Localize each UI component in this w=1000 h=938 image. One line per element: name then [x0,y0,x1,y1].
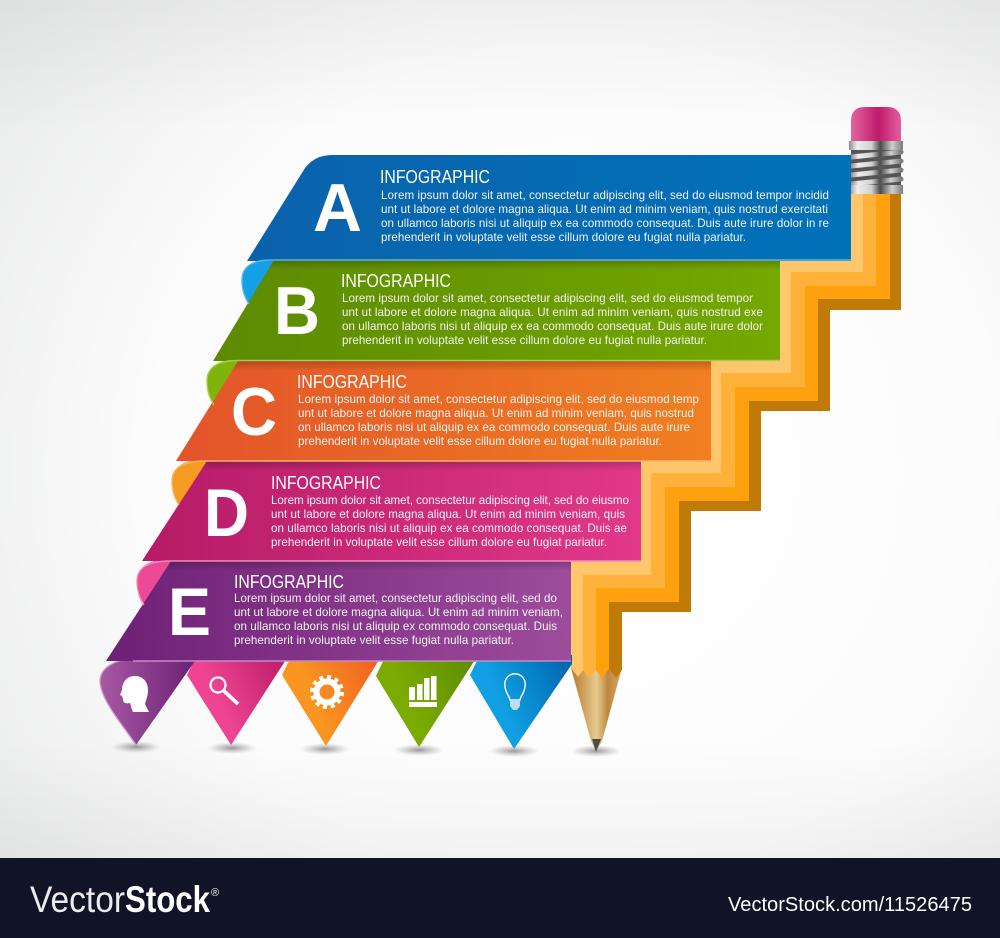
text block E: on ullamco laboris nisi ut aliquip ex commodo consequat. Duis [234,620,557,633]
pin: purple head [100,659,195,745]
pencil [571,107,903,752]
pins [100,655,572,749]
heading B: INFOGRAPHIC [341,270,451,291]
letter B: B [274,273,320,349]
text block E [234,592,563,647]
text block B [342,292,763,347]
heading C: INFOGRAPHIC [297,371,407,392]
ribbon A curl [242,258,285,304]
pencil wood tip [571,668,622,752]
text block E: unt ut labore et dolore magna aliqua. Ut enim ad minim veniam, [234,606,563,619]
letter C: C [231,374,277,450]
ribbon D band [142,461,641,561]
icon: head [120,676,149,712]
icon: magnifier [210,678,238,704]
footer logo: Vector [30,879,125,920]
ribbon D curl [137,559,180,605]
letter E: E [168,574,211,650]
icon: bar chart [409,676,437,707]
text block D [271,494,629,549]
heading E: INFOGRAPHIC [234,571,344,592]
text block B: Lorem ipsum dolor sit amet, consectetur adipiscing elit, sed do eiusmod tempor [342,292,753,305]
pencil lead [592,739,601,752]
pin: green chart [376,655,478,747]
text block E: prehenderit in voluptate velit esse fugiat nulla pariatur. [234,634,514,647]
text block C [298,393,699,448]
text block D: Lorem ipsum dolor sit amet, consectetur adipiscing elit, sed do eiusmo [271,494,629,507]
panel: ribbon D [137,461,711,605]
text block E: Lorem ipsum dolor sit amet, consectetur adipiscing elit, sed do [234,592,557,605]
text block A [381,189,829,244]
pin: pink magnifier [187,655,289,745]
letter D: D [204,475,249,551]
text block D: prehenderit in voluptate velit esse cillum dolore eu fugiat pariatur. [271,536,607,549]
panel: ribbon A [242,155,851,304]
footer logo [30,879,210,920]
pin shadows [111,741,621,757]
letter A: A [313,170,362,246]
text block A: on ullamco laboris nisi ut aliquip ex ea commodo consequat. Duis aute irure dolor in re [381,217,829,230]
ribbon C band [176,361,711,461]
text block C: prehenderit in voluptate velit esse cillum dolore eu fugiat nulla pariatur. [298,435,662,448]
ribbon E band [106,561,571,661]
ribbon B band [213,260,780,361]
text block B: unt ut labore et dolore magna aliqua. Ut enim ad minim veniam, quis nostrud exe [342,306,763,319]
text block A: prehenderit in voluptate velit esse cillum dolore eu fugiat nulla pariatur. [381,231,746,244]
pencil eraser [851,107,901,142]
pencil ferrule [849,141,903,194]
ribbon B curl [207,359,250,405]
heading A: INFOGRAPHIC [380,166,490,187]
text block B: on ullamco laboris nisi ut aliquip ex ea commodo consequat. Duis aute irure dolor [342,320,763,333]
footer logo: Stock [125,879,210,920]
text block C: unt ut labore et dolore magna aliqua. Ut enim ad minim veniam, quis nostrud [298,407,694,420]
text block B: prehenderit in voluptate velit esse cillum dolore eu fugiat nulla pariatur. [342,334,707,347]
text block D: unt ut labore et dolore magna aliqua. Ut enim ad minim veniam, quis [271,508,625,521]
text block D: on ullamco laboris nisi ut aliquip ex ea commodo consequat. Duis ae [271,522,627,535]
panel: ribbon E [106,561,641,661]
text block A: unt ut labore et dolore magna aliqua. Ut enim ad minim veniam, quis nostrud exercitati [381,203,828,216]
text block C: on ullamco laboris nisi ut aliquip ex ea commodo consequat. Duis aute irure [298,421,690,434]
pin: orange gear [282,655,382,746]
panel: ribbon B [207,260,851,405]
pencil stepped body [571,193,901,678]
footer bar [0,858,1000,938]
footer url: VectorStock.com/11526475 [728,894,972,916]
panel: ribbon C [172,360,780,505]
footer registered mark: ® [211,887,219,899]
pin: blue lightbulb [470,655,572,749]
heading D: INFOGRAPHIC [271,472,381,493]
icon: lightbulb [505,674,525,710]
ribbon A band [247,155,851,261]
ribbon C curl [172,459,215,505]
text block C: Lorem ipsum dolor sit amet, consectetur adipiscing elit, sed do eiusmod temp [298,393,699,406]
text block A: Lorem ipsum dolor sit amet, consectetur adipiscing elit, sed do eiusmod tempor incidid [381,189,829,202]
icon: gear [312,677,342,707]
